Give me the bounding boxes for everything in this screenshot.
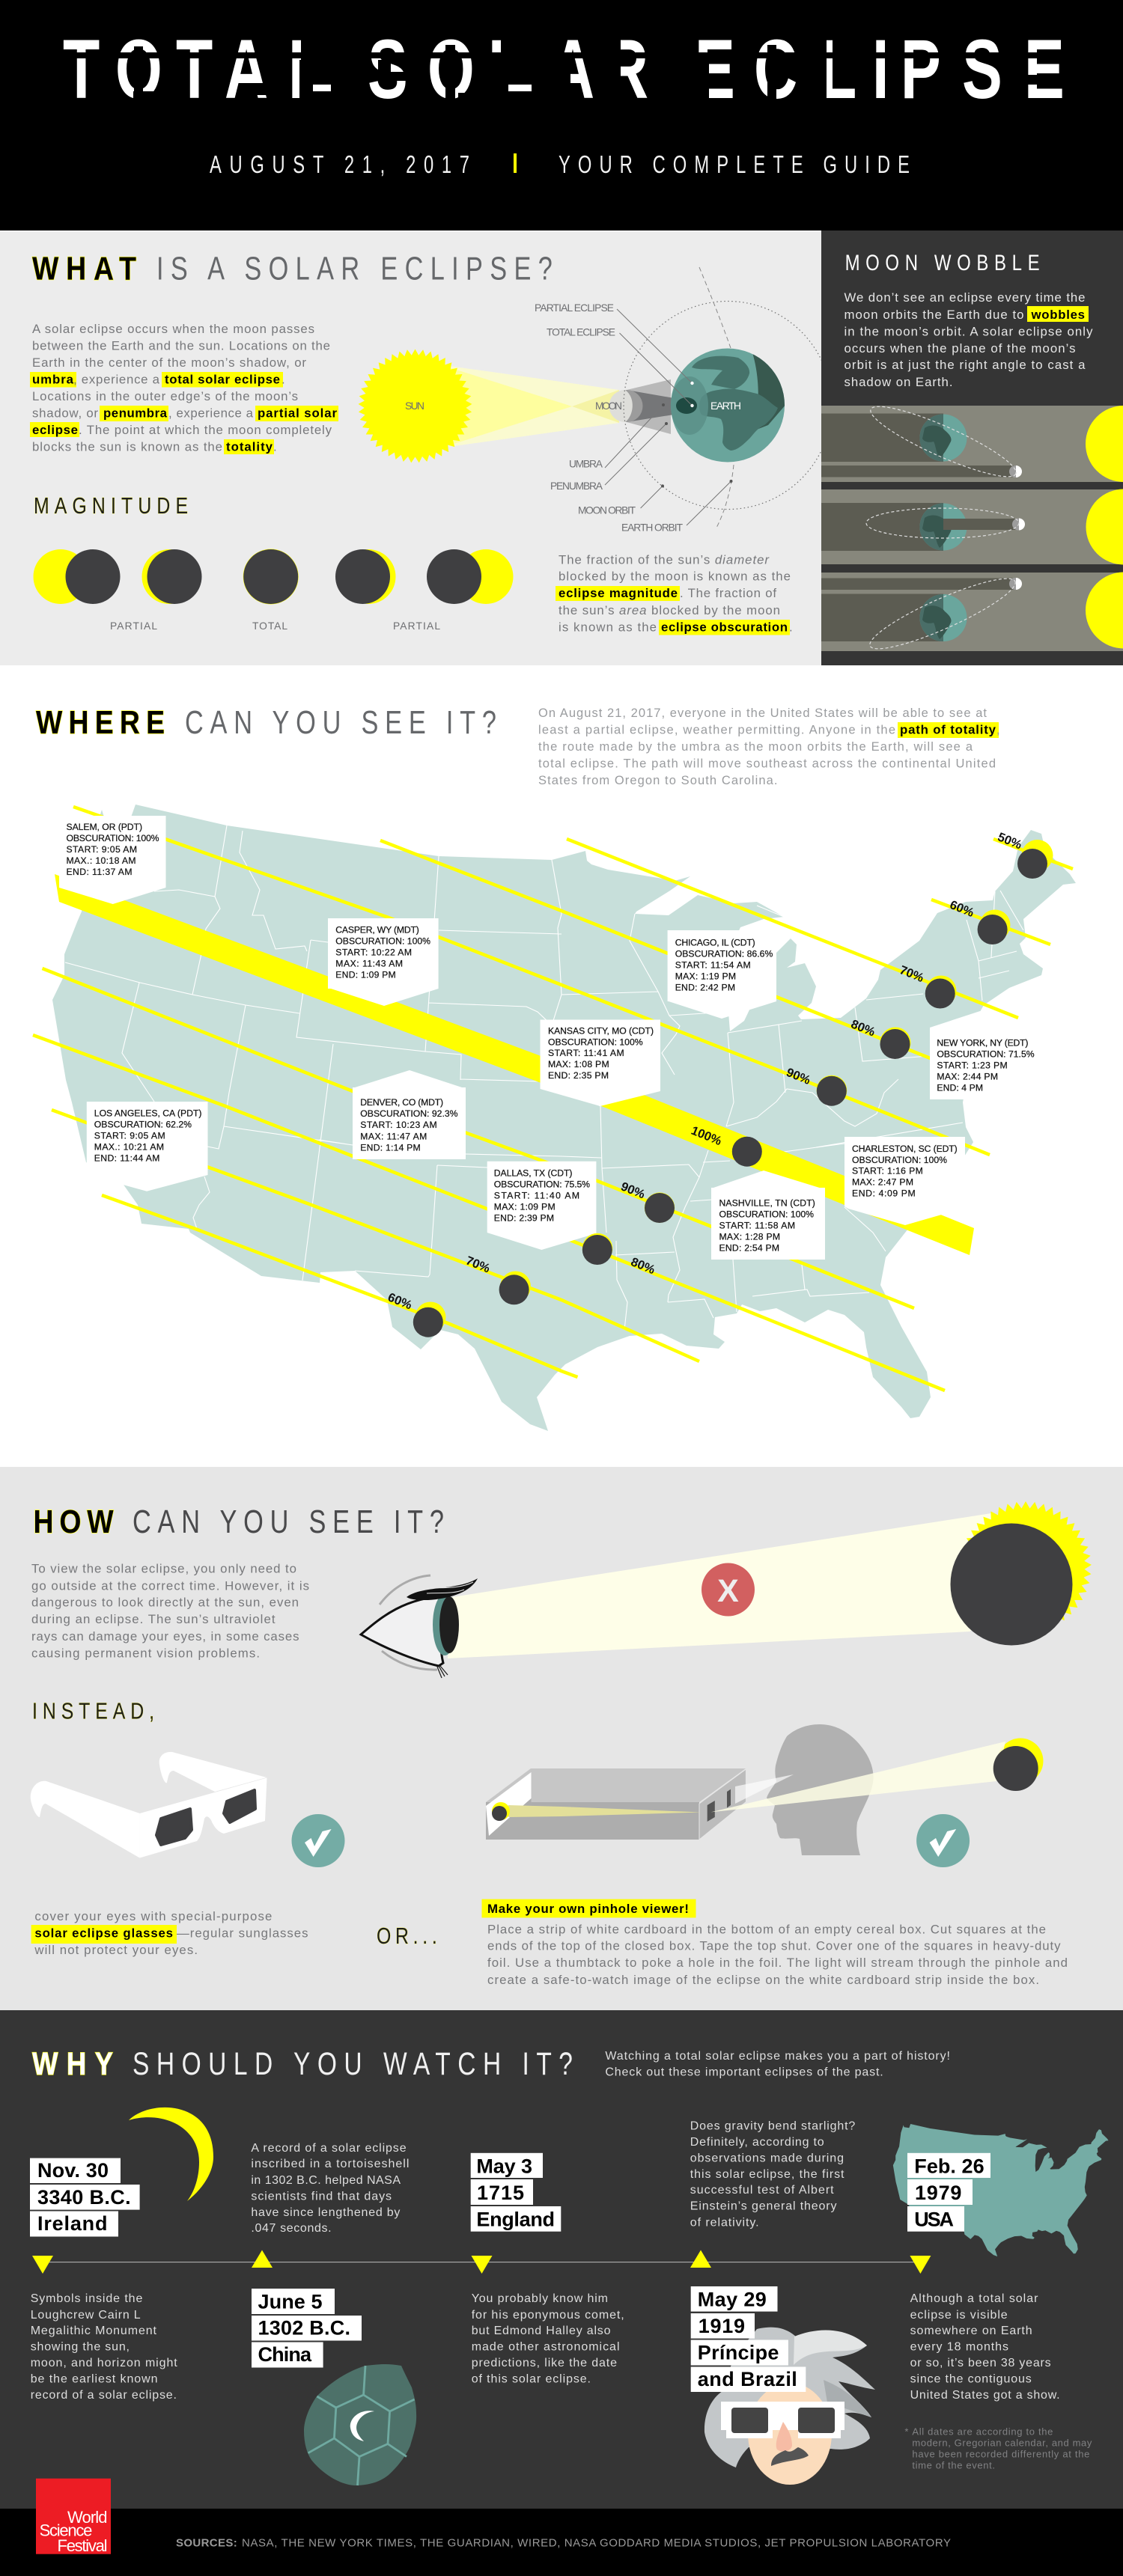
text block: magnitude and obscuration: the sun’s area blocked by the moon [559,603,780,617]
section background: page header [0,0,1123,231]
chart: magnitude phases: PARTIAL [393,620,440,632]
text block: eclipse definition: . The point at which the moon completely [79,423,332,437]
illustration: wobble strip above [821,406,1123,482]
event: Principe and Brazil 1919: of relativity. [690,2217,759,2229]
event: USA 1979: USA [914,2208,954,2230]
event: USA 1979: United States got a show. [910,2389,1060,2402]
moon orbit [624,301,832,509]
callout: Charleston [844,1137,965,1225]
callout: Chicago: MAX: 1:19 PM [675,971,736,982]
event: USA 1979: Feb. 26 [914,2155,984,2178]
event: China 1302 BC: China [258,2343,312,2366]
diagram labels [535,302,684,533]
event: USA 1979: every 18 months [910,2341,1008,2354]
text block: eclipse definition: totality [226,440,273,454]
map: path of the eclipse across the United States [33,805,1076,1431]
text block: do not look at the sun: dangerous to look directly at the sun, even [31,1595,299,1609]
event: England 1715: You probably know him [472,2292,608,2305]
text block: eclipse definition: total solar eclipse [165,373,280,386]
callout: New York: NEW YORK, NY (EDT) [937,1037,1028,1048]
icon: moon [609,390,642,422]
diagram labels: PENUMBRA [550,480,603,492]
callout: Chicago [668,930,776,1019]
callout: Kansas City: START: 11:41 AM [548,1048,624,1058]
callout: Casper: START: 10:22 AM [335,947,412,957]
text block: magnitude and obscuration: . [789,620,793,635]
text block: wobble explanation: occurs when the plane of the moon’s [844,341,1075,355]
callout: Salem: OBSCURATION: 100% [66,833,159,843]
illustration: wobble strip below [821,568,1123,659]
event: Ireland 3340 BC: moon, and horizon might [31,2357,177,2369]
map: US outline [52,805,1076,1431]
callout: Kansas City [541,1019,660,1106]
text block: magnitude and obscuration [556,552,793,635]
callout: Casper: MAX: 11:43 AM [335,958,403,968]
heading: moon wobble: MOON WOBBLE [845,249,1040,275]
event: Principe and Brazil 1919: successful test of Albert [690,2184,834,2197]
text block: glasses advice [31,1909,308,1957]
event: China 1302 BC [251,2142,416,2485]
illustration: sun moon earth diagram [359,267,832,533]
callout: Denver: START: 10:23 AM [360,1120,437,1130]
callout: Denver [353,1070,466,1159]
icon: Einstein with eclipse glasses [704,2328,875,2485]
icon: warning X: X [717,1573,739,1609]
text block: where intro: least a partial eclipse, weather permitting. Anyone in the [538,724,895,737]
chart: magnitude phases [33,549,514,632]
text block: eclipse definition: A solar eclipse occurs when the moon passes [32,322,314,336]
callout: Kansas City: MAX: 1:08 PM [548,1059,609,1069]
text block: eclipse definition: Locations in the outer edge’s of the moon’s [32,389,298,403]
title: TOTAL SOLAR ECLIPSE [63,22,1065,116]
callout: Denver: DENVER, CO (MDT) [360,1097,443,1108]
illustration: pinhole viewer [486,1724,1044,1855]
callout: Kansas City: END: 2:35 PM [548,1070,609,1081]
heading: how can you see it: CAN YOU SEE IT? [133,1504,444,1540]
text block: eclipse definition: . [273,440,277,454]
event: Ireland 3340 BC: 3340 B.C. [37,2186,131,2209]
diagram labels: PARTIAL ECLIPSE [535,302,614,314]
event: England 1715 [471,2153,624,2385]
text block: pinhole viewer instructions: Place a strip of white cardboard in the bottom of an empty cereal box. Cut squares at the [487,1922,1046,1937]
callout: New York: OBSCURATION: 71.5% [937,1049,1035,1060]
callout: Los Angeles: MAX.: 10:21 AM [94,1142,164,1153]
text block: glasses advice: —regular sunglasses [177,1926,308,1940]
callout: Casper: OBSCURATION: 100% [335,936,430,946]
logo: World Science Festival: Science [40,2521,92,2540]
event: Principe and Brazil 1919: 1919 [699,2315,745,2337]
heading: instead: INSTEAD, [32,1698,154,1724]
text block: eclipse definition: penumbra [103,406,168,421]
cereal box [486,1768,746,1840]
callout: Dallas: DALLAS, TX (CDT) [494,1168,572,1179]
event: England 1715: for his eponymous comet, [472,2309,624,2322]
text block: do not look at the sun: go outside at the correct time. However, it is [31,1578,309,1593]
callout: Kansas City: OBSCURATION: 100% [548,1037,643,1047]
text block: magnitude and obscuration: blocked by the moon is known as the [559,570,791,584]
callout: Salem: SALEM, OR (PDT) [66,822,142,832]
map: obscuration percentage labels: 60% [386,1290,414,1313]
callout: Denver: OBSCURATION: 92.3% [360,1108,458,1119]
chart: magnitude phases: PARTIAL [110,620,157,632]
callout: Dallas: END: 2:39 PM [494,1213,554,1224]
callout: Salem [59,816,166,904]
callout: Nashville: START: 11:58 AM [719,1221,795,1231]
text block: pinhole viewer instructions: foil. Use a thumbtack to poke a hole in the foil. The light will stream through the pinhole and [487,1956,1068,1970]
callout: Los Angeles [87,1102,208,1191]
earth orbit [699,267,734,528]
text block: where intro: path of totality [900,723,996,737]
logo: World Science Festival [36,2479,111,2555]
callout: Denver: END: 1:14 PM [360,1143,421,1153]
text block: why intro: Watching a total solar eclipse makes you a part of history! [605,2050,950,2063]
illustration: unsafe direct viewing beam [448,1513,1048,1658]
map: obscuration percentage labels: 90% [619,1179,647,1202]
map: eclipse phase markers [413,840,1053,1337]
event: USA 1979 [893,2124,1109,2402]
heading: where can you see it: CAN YOU SEE IT? [185,704,496,741]
map: obscuration percentage labels: 80% [849,1017,877,1040]
text block: eclipse definition: Earth in the center of the moon’s shadow, or [32,355,306,370]
callout: Charleston: MAX: 2:47 PM [852,1177,913,1188]
footer [0,2509,1123,2576]
icon: check badge pinhole [916,1814,970,1867]
callout: Nashville: OBSCURATION: 100% [719,1209,814,1220]
event: China 1302 BC: 1302 B.C. [258,2317,350,2340]
text block: magnitude and obscuration: is known as the [559,620,657,635]
leader lines [605,309,731,525]
heading: why should you watch it: SHOULD YOU WATCH IT? [133,2046,573,2082]
callout: Chicago: START: 11:54 AM [675,960,751,971]
callout: Casper: CASPER, WY (MDT) [335,924,419,935]
text block: wobble explanation: We don’t see an eclipse every time the [844,290,1086,305]
text block: wobble explanation: shadow on Earth. [844,375,952,389]
callout: Dallas: MAX: 1:09 PM [494,1202,556,1212]
event: USA 1979: since the contiguous [910,2372,1032,2385]
callout: Dallas: OBSCURATION: 75.5% [494,1179,590,1190]
icon: warning X [702,1563,755,1617]
text block: wobble explanation: moon orbits the Earth due to [844,308,1024,322]
event: China 1302 BC: inscribed in a tortoiseshell [251,2158,409,2170]
event: USA 1979: 1979 [915,2182,961,2204]
callout: Dallas: START: 11:40 AM [494,1191,579,1201]
event: England 1715: predictions, like the date [472,2357,617,2369]
text block: where intro: the route made by the umbra as the moon orbits the Earth, will see a [538,740,973,754]
callout: New York: END: 4 PM [937,1082,983,1093]
event: England 1715: of this solar eclipse. [472,2372,591,2385]
event: Ireland 3340 BC: Symbols inside the [31,2292,142,2305]
text block: do not look at the sun [31,1561,309,1660]
map: obscuration percentage labels: 70% [898,963,926,985]
event: USA 1979: or so, it’s been 38 years [910,2357,1051,2369]
footer: sources: NASA, THE NEW YORK TIMES, THE GUARDIAN, WIRED, NASA GODDARD MEDIA STUDIOS, JET PROPULSION LABORATORY [242,2537,951,2549]
text block: magnitude and obscuration: eclipse obscuration [661,620,788,635]
text block: eclipse definition: , experience a [168,406,254,421]
callout: Nashville: END: 2:54 PM [719,1243,779,1254]
event: China 1302 BC: June 5 [258,2290,322,2313]
event: Principe and Brazil 1919: Príncipe [698,2341,779,2363]
icon: tortoiseshell [304,2364,416,2485]
icon: US map [893,2124,1109,2256]
event: Ireland 3340 BC: Ireland [37,2212,108,2235]
callout: New York: START: 1:23 PM [937,1060,1008,1070]
event: China 1302 BC: in 1302 B.C. helped NASA [251,2174,401,2187]
event: Principe and Brazil 1919: observations made during [690,2152,844,2164]
map: obscuration percentage labels: 80% [629,1255,657,1277]
text block: eclipse definition: between the Earth and the sun. Locations on the [32,338,330,353]
event: England 1715: but Edmond Halley also [472,2325,611,2337]
icon: crescent [129,2108,213,2201]
footnote: All dates are according to the [912,2426,1053,2437]
text block: where intro: total eclipse. The path will move southeast across the continental United [538,757,996,771]
event: England 1715: 1715 [477,2182,524,2204]
event: England 1715: May 3 [476,2155,532,2178]
text block: why intro: Check out these important eclipses of the past. [605,2066,883,2078]
text block: wobble explanation: wobbles [1030,308,1085,322]
panel: moon wobble [821,231,1123,665]
footnote [904,2426,1092,2471]
event: USA 1979: somewhere on Earth [910,2325,1032,2337]
text block: pinhole viewer instructions: create a safe-to-watch image of the eclipse on the white cardboard strip inside the box. [487,1973,1039,1987]
callout: Los Angeles: END: 11:44 AM [94,1153,159,1164]
icon: solar eclipse glasses [31,1752,267,1858]
callout: Nashville [711,1171,825,1260]
text block: eclipse definition: . [281,373,285,386]
map: obscuration lines [33,807,1073,1391]
text block: do not look at the sun: rays can damage your eyes, in some cases [31,1629,299,1643]
callout: Denver: MAX: 11:47 AM [360,1132,427,1142]
map: obscuration percentage labels: 70% [464,1254,492,1276]
callout: Charleston: OBSCURATION: 100% [852,1155,947,1165]
text block: glasses advice: will not protect your eyes. [34,1943,198,1957]
text block: eclipse definition [30,322,338,454]
map: obscuration percentage labels: 60% [948,898,976,920]
text block: wobble explanation: orbit is at just the right angle to cast a [844,358,1086,372]
text block: wobble explanation [844,290,1093,389]
timeline [32,2250,931,2274]
chart: magnitude phases: TOTAL [252,620,287,632]
heading: what is a solar eclipse: IS A SOLAR ECLIPSE? [156,250,553,287]
footer: sources: SOURCES: [176,2537,237,2549]
event: Principe and Brazil 1919: and Brazil [698,2368,797,2390]
text block: pinhole viewer instructions: Make your own pinhole viewer! [487,1902,689,1916]
callout: Los Angeles: LOS ANGELES, CA (PDT) [94,1108,201,1119]
heading: why should you watch it: WHY [32,2046,113,2082]
callout: New York [930,1011,1043,1099]
callout: Nashville: MAX: 1:28 PM [719,1232,780,1242]
event: Ireland 3340 BC: showing the sun, [31,2341,130,2354]
map: obscuration percentage labels: 100% [689,1124,724,1148]
callout: Chicago: END: 2:42 PM [675,983,735,993]
event: Principe and Brazil 1919: this solar eclipse, the first [690,2168,844,2181]
icon: sun [359,331,490,473]
text block: magnitude and obscuration: . The fraction of [680,586,776,600]
head silhouette [767,1724,874,1855]
icon: eye [361,1575,478,1678]
diagram labels: EARTH ORBIT [621,522,684,533]
event: USA 1979: eclipse is visible [910,2309,1008,2322]
diagram labels: UMBRA [569,458,603,470]
event: Ireland 3340 BC: be the earliest known [31,2372,158,2385]
event: Ireland 3340 BC [30,2108,213,2402]
heading: how can you see it: HOW [33,1503,114,1540]
event: Principe and Brazil 1919 [690,2120,875,2485]
text block: do not look at the sun: To view the solar eclipse, you only need to [31,1561,296,1575]
event: China 1302 BC: .047 seconds. [251,2222,332,2235]
callout: Salem: MAX.: 10:18 AM [66,855,136,866]
text block: where intro [538,706,1000,787]
logo: World Science Festival: Festival [57,2536,108,2555]
event: China 1302 BC: have since lengthened by [251,2206,400,2219]
event: England 1715: England [476,2208,555,2230]
callout: Salem: END: 11:37 AM [66,867,132,877]
event: China 1302 BC: A record of a solar eclipse [251,2142,407,2155]
text block: wobble explanation: in the moon’s orbit. A solar eclipse only [844,325,1093,338]
callout: Casper [328,918,439,1006]
map: obscuration percentage labels [386,830,1024,1313]
callout: Charleston: START: 1:16 PM [852,1166,923,1176]
event: USA 1979: Although a total solar [910,2292,1038,2305]
subtitle: date and guide [210,151,910,179]
callout: Charleston: END: 4:09 PM [852,1188,916,1199]
heading: what is a solar eclipse: WHAT [32,250,136,287]
callout: Kansas City: KANSAS CITY, MO (CDT) [548,1025,654,1036]
callout: Nashville: NASHVILLE, TN (CDT) [719,1198,815,1209]
illustration: sun moon earth diagram: SUN [405,400,424,412]
subtitle: date and guide: AUGUST 21, 2017 [210,151,469,179]
logo: World Science Festival: World [67,2508,108,2527]
text block: magnitude and obscuration: The fraction of the sun’s diameter [559,552,770,567]
event: Principe and Brazil 1919: Einstein’s general theory [690,2200,837,2213]
text block: eclipse definition: partial solar [258,406,337,421]
event: Principe and Brazil 1919: May 29 [698,2288,767,2310]
panel: how can you see it [0,1467,1123,2010]
heading: where can you see it: WHERE [36,703,165,741]
text block: do not look at the sun: during an eclipse. The sun’s ultraviolet [31,1612,276,1626]
label: or: OR... [377,1923,437,1949]
text block: do not look at the sun: causing permanent vision problems. [31,1646,260,1660]
map: path of totality [55,874,974,1255]
text block: eclipse definition: shadow, or [32,406,98,421]
text block: eclipse definition: umbra [32,373,74,386]
callout: Los Angeles: START: 9:05 AM [94,1131,165,1141]
panel: why should you watch it [0,2010,1123,2509]
event: Ireland 3340 BC: record of a solar eclipse. [31,2389,177,2402]
callout: Chicago: CHICAGO, IL (CDT) [675,938,755,948]
diagram labels: TOTAL ECLIPSE [547,326,615,338]
text block: eclipse definition: , experience a [73,373,160,386]
event: China 1302 BC: scientists find that days [251,2190,392,2203]
text block: eclipse definition: eclipse [32,423,78,437]
icon: earth: EARTH [710,400,741,412]
footnote: * [904,2426,908,2437]
heading: where can you see it [36,703,496,741]
text block: where intro: On August 21, 2017, everyone in the United States will be able to see at [538,706,987,720]
callout: Salem: START: 9:05 AM [66,844,137,855]
callout: Casper: END: 1:09 PM [335,969,396,980]
map: obscuration percentage labels: 90% [785,1066,812,1087]
text block: pinhole viewer instructions: ends of the top of the closed box. Tape the top shut. Cover one of the squares in heavy-duty [487,1938,1061,1953]
text block: glasses advice: cover your eyes with special-purpose [34,1909,272,1923]
subtitle: date and guide: YOUR COMPLETE GUIDE [559,151,910,179]
text block: glasses advice: solar eclipse glasses [34,1926,173,1940]
text block: magnitude and obscuration: eclipse magnitude [559,586,678,600]
text block: where intro: States from Oregon to South Carolina. [538,774,777,787]
map: obscuration percentage labels: 50% [996,830,1024,852]
map: state borders [65,825,1023,1330]
footnote: modern, Gregorian calendar, and may [912,2437,1092,2448]
heading: magnitude: MAGNITUDE [34,492,188,519]
diagram labels: MOON ORBIT [578,504,636,516]
event: Principe and Brazil 1919: Definitely, according to [690,2136,824,2149]
text block: where intro: , [996,724,1000,737]
event: Principe and Brazil 1919: Does gravity bend starlight? [690,2120,855,2133]
text block: eclipse definition: blocks the sun is known as the [32,440,222,454]
callout: Chicago: OBSCURATION: 86.6% [675,949,773,959]
footnote: time of the event. [912,2459,995,2471]
callout: New York: MAX: 2:44 PM [937,1072,998,1082]
icon: earth [671,344,786,463]
icon: check badge glasses [292,1814,344,1867]
text block: pinhole viewer instructions [482,1899,1068,1987]
callout: Los Angeles: OBSCURATION: 62.2% [94,1120,192,1130]
footnote: have been recorded differently at the [912,2449,1089,2459]
event: Ireland 3340 BC: Nov. 30 [37,2159,109,2182]
event: England 1715: made other astronomical [472,2341,620,2354]
icon: eclipsed sun [951,1480,1113,1645]
illustration: wobble strip aligned [821,489,1123,564]
text block: why intro [605,2050,950,2078]
callout: Charleston: CHARLESTON, SC (EDT) [852,1144,958,1154]
small eclipse [997,1738,1044,1784]
event: Ireland 3340 BC: Loughcrew Cairn L [31,2309,141,2322]
event: Ireland 3340 BC: Megalithic Monument [31,2325,157,2337]
callout: Dallas [487,1162,596,1250]
diagram labels: MOON [595,400,622,412]
panel: what is a solar eclipse [0,231,832,665]
